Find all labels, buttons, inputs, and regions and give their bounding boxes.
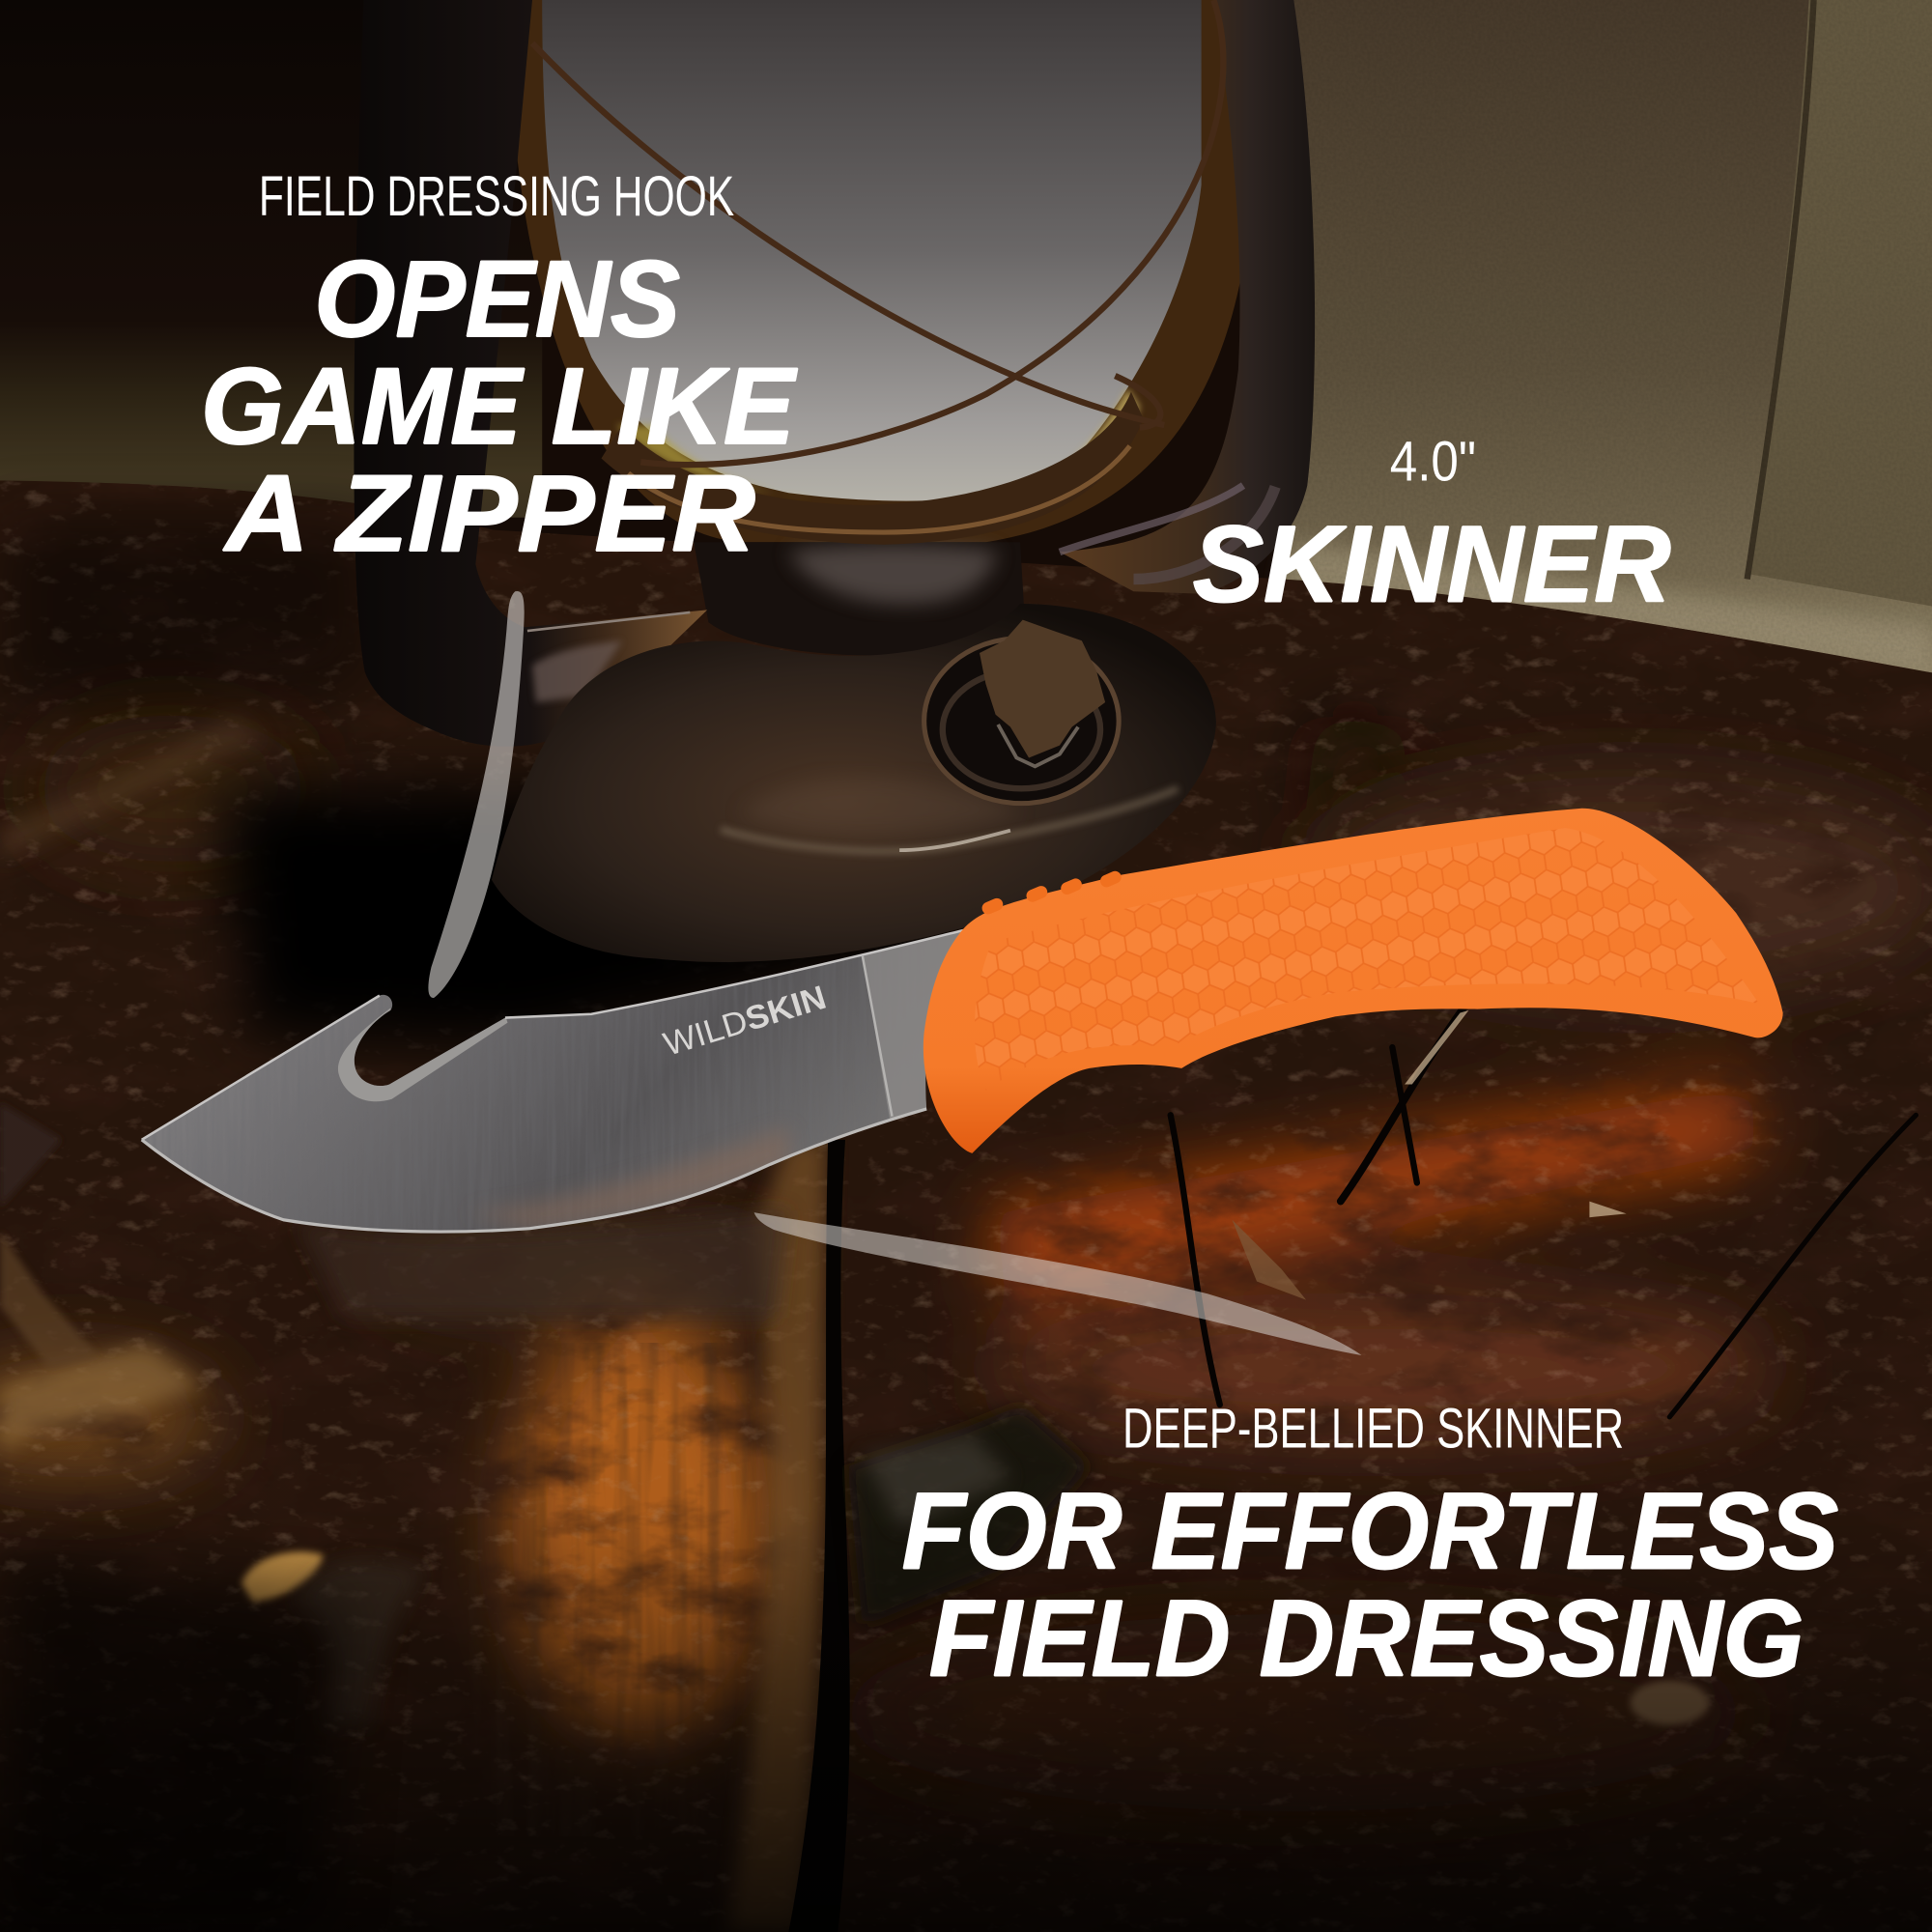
- pointer: belly: [754, 1212, 1361, 1355]
- heading: opens game like a zipper: [201, 238, 798, 574]
- heading: skinner: SKINNER: [1193, 502, 1671, 624]
- lantern glass rim: [601, 392, 1144, 545]
- wooden table: [0, 469, 1932, 1932]
- lantern right post: [1060, 0, 1315, 594]
- background wall left: [0, 0, 542, 518]
- shadow plank under blade: [296, 1210, 788, 1319]
- table light patches: [0, 715, 1932, 1811]
- label: 4.0 inch: 4.0": [1390, 430, 1476, 493]
- heading: opens game like a zipper: A ZIPPER: [222, 452, 755, 574]
- knife: [135, 809, 1783, 1244]
- rock chip: [848, 1405, 1091, 1627]
- blade reflection: [469, 1127, 788, 1229]
- lantern arm highlight: [532, 640, 622, 702]
- callout: deep-bellied skinner: [902, 1398, 1838, 1699]
- lantern: [354, 0, 1315, 962]
- lantern left post: [354, 0, 707, 747]
- lantern knob: [924, 620, 1119, 804]
- lantern amber backing: [518, 0, 1244, 542]
- lantern glass: [542, 0, 1202, 501]
- pointer: hook: [428, 591, 525, 998]
- wood splinter highlights: [1233, 1010, 1627, 1300]
- label: deep-bellied skinner: DEEP-BELLIED SKINNER: [1122, 1398, 1624, 1461]
- lantern wire guard: [532, 0, 1223, 465]
- heading: opens game like a zipper: OPENS: [314, 238, 680, 359]
- wood scratches: [1171, 1005, 1916, 1417]
- thumb ridges: [988, 877, 1115, 908]
- heading: for effortless field dressing: [902, 1470, 1838, 1699]
- blade ricasso: [863, 930, 963, 1119]
- blade hook bevel: [338, 1008, 508, 1101]
- heading: for effortless field dressing: FOR EFFORTLESS: [902, 1470, 1838, 1592]
- callout: skinner: [1193, 430, 1671, 624]
- plank gap: [788, 1140, 850, 1932]
- honeycomb grip: [975, 828, 1759, 1091]
- dark falloff left top: [0, 518, 370, 715]
- orange handle: [923, 809, 1783, 1153]
- lantern base: [492, 604, 1216, 962]
- blade logo: WILDSKIN: [660, 980, 831, 1064]
- blade: [135, 924, 974, 1244]
- heading: for effortless field dressing: FIELD DRESSING: [929, 1577, 1804, 1699]
- dark bottom-left falloff: [0, 1552, 345, 1932]
- lantern collar: [601, 392, 1144, 655]
- knot: [242, 1551, 323, 1602]
- heading: opens game like a zipper: GAME LIKE: [201, 345, 798, 467]
- left plank edge highlight: [727, 1140, 828, 1932]
- left torn wood: [0, 1343, 203, 1454]
- tent strap: [1749, 0, 1932, 607]
- label: field dressing hook: FIELD DRESSING HOOK: [259, 165, 734, 228]
- left plank streaks: [517, 1343, 753, 1725]
- callout: field dressing hook: [201, 165, 798, 574]
- canvas tent right: [1282, 0, 1932, 672]
